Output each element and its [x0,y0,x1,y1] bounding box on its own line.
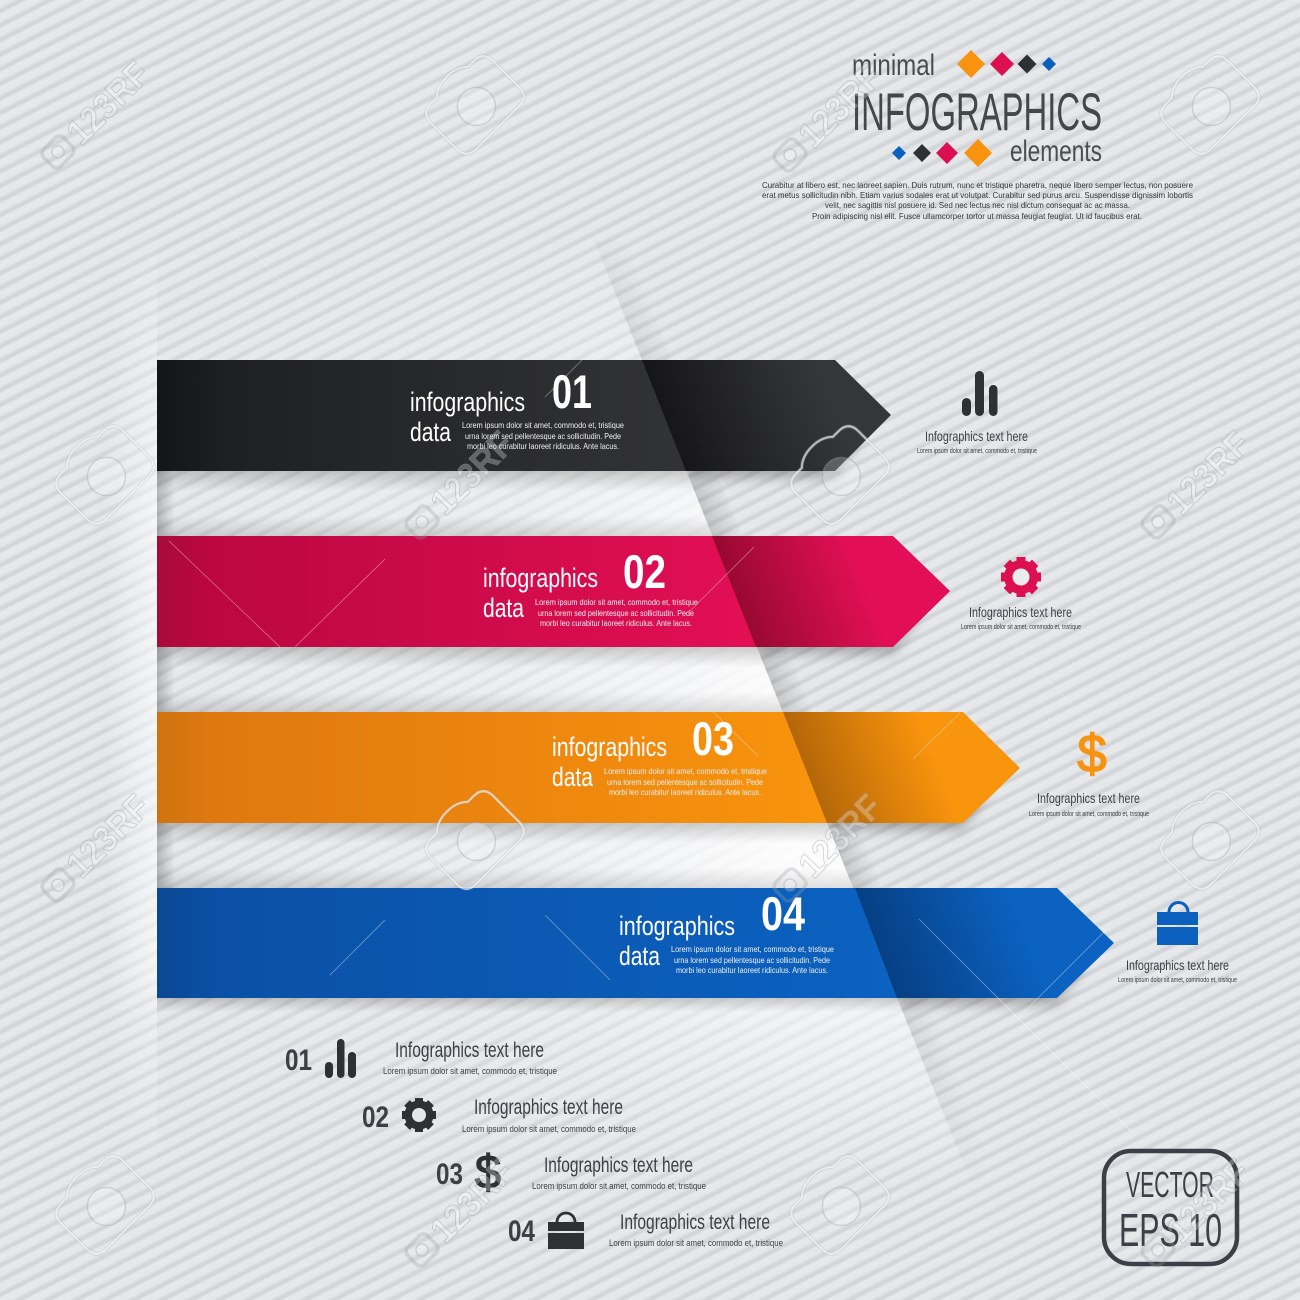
right label 03: Lorem ipsum dolor sit amet, commodo et, tristique [1029,811,1149,818]
description text: Proin adipiscing nisl elit. Fusce ullamcorper tortor ut massa feugiat feugiat. Ut id faucibus erat. [812,211,1142,221]
list text 02: Lorem ipsum dolor sit amet, commodo et, tristique [462,1124,636,1134]
ribbon 03 fold shade [783,712,1020,823]
panel: ribbon 02 [157,536,950,647]
watermark logos: 123RF [1158,423,1258,523]
list number 01: 01 [285,1044,312,1077]
title: minimal: minimal [852,49,935,82]
right label 03: Infographics text here [1037,790,1140,806]
list text 01: Lorem ipsum dolor sit amet, commodo et, tristique [383,1066,557,1076]
icon: dollar, orange: $ [1077,725,1107,784]
ribbon 01 heading: infographics [410,387,525,417]
icon: dollar: $ [475,1145,501,1198]
arrow drop shadows [690,440,1085,1005]
list text 04 [609,1211,783,1248]
icon: briefcase, blue [1157,902,1198,945]
ribbon 01 subheading: data [410,417,452,447]
icon: gear, crimson [1001,557,1041,597]
list text 03 [532,1154,706,1191]
watermark logos: 123RF [58,786,158,886]
ribbon 04 subheading: data [619,941,661,971]
bottom diamonds [892,139,992,167]
ribbon 03 subheading: data [552,762,594,792]
ribbon 03 body text [604,766,767,797]
panel: ribbon 04 [157,887,1114,998]
icon: bar chart [325,1039,356,1078]
description text: velit, nec sagittis nisl posuere id. Sed nec lectus nec nisl dictum consequat ac ac massa. [825,200,1130,210]
ribbon 02 body text: urna lorem sed pellentesque ac sollicitudin. Pede [538,608,694,618]
ribbon 01 body text: Lorem ipsum dolor sit amet, commodo et, tristique [462,420,624,430]
description text: erat metus sollicitudin nibh. Etiam varius sodales erat ut volutpat. Curabitur sed purus arcu. Suspendisse dignissim lobortis [762,190,1193,200]
ribbon 03 body text: Lorem ipsum dolor sit amet, commodo et, tristique [604,766,767,776]
right label 02: Infographics text here [969,604,1072,620]
ribbon 03 heading: infographics [552,732,667,762]
ribbon 04 fold shade [855,888,1114,998]
description text: Curabitur at libero est, nec laoreet sapien. Duis rutrum, nunc et tristique pharetra, neque libero semper lectus, non posuere [762,180,1193,190]
watermark logos: 123RF [790,56,890,156]
ribbon 02 subheading: data [483,593,525,623]
ribbon 03 body text: morbi leo curabitur laoreet ridiculus. Ante lacus. [609,787,761,797]
top diamonds [957,50,1056,78]
right label 04: Lorem ipsum dolor sit amet, commodo et, tristique [1118,977,1237,984]
ribbon 01 fold shade [642,360,891,471]
ribbon 04 number: 04 [761,887,805,940]
watermark logos: 123RF [1158,1151,1258,1251]
ribbon 04 body text [671,944,834,975]
list text 02 [462,1096,636,1134]
right label 01: Infographics text here [925,428,1028,444]
ribbon 04 body text: Lorem ipsum dolor sit amet, commodo et, tristique [671,944,834,954]
ribbon 03 number: 03 [692,712,734,765]
right label 03 [1029,790,1149,818]
list item 04 [508,1211,783,1249]
list text 01 [383,1039,557,1076]
ribbon 04 body text: morbi leo curabitur laoreet ridiculus. Ante lacus. [676,965,828,975]
watermark logos: 123RF [790,786,890,886]
ribbon 02 body text [535,597,698,628]
ribbon 02 body text: Lorem ipsum dolor sit amet, commodo et, tristique [535,597,698,607]
list number 02: 02 [362,1101,389,1134]
folded paper panel [122,284,946,1120]
badge: vector eps 10: EPS 10 [1119,1204,1222,1256]
icon: briefcase [548,1213,584,1249]
ribbon 01 body text: morbi leo curabitur laoreet ridiculus. Ante lacus. [467,441,619,451]
description text [762,180,1193,221]
list text 03: Infographics text here [544,1154,693,1177]
list text 04: Lorem ipsum dolor sit amet, commodo et, tristique [609,1238,783,1248]
ribbon 01 body text [462,420,624,451]
ribbon 04 heading: infographics [619,911,735,941]
watermark logos: 123RF [422,1151,522,1251]
right label 04: Infographics text here [1126,957,1229,973]
list text 02: Infographics text here [474,1096,623,1119]
right label 02 [961,604,1081,631]
ribbon 02 heading: infographics [483,563,598,593]
list text 04: Infographics text here [620,1211,770,1234]
icon: gear [402,1098,436,1132]
panel: ribbon 03 [157,712,1020,823]
ribbon 02 body text: morbi leo curabitur laoreet ridiculus. Ante lacus. [540,618,692,628]
list number 03: 03 [436,1158,463,1191]
right label 04 [1118,957,1237,984]
list text 01: Infographics text here [395,1039,544,1062]
right label 01: Lorem ipsum dolor sit amet, commodo et, tristique [917,448,1037,455]
badge: vector eps 10 [1104,1151,1237,1264]
panel: ribbon 01 [157,360,891,471]
title: INFOGRAPHICS: INFOGRAPHICS [852,83,1102,142]
title: elements: elements [1010,135,1102,168]
ribbon 01 number: 01 [552,365,592,418]
right label 01 [917,428,1037,455]
list item 01 [285,1039,557,1078]
ribbon 01 body text: urna lorem sed pellentesque ac sollicitudin. Pede [465,431,621,441]
hairline crosses [169,173,1135,1135]
watermark logos: 123RF [422,423,522,523]
ribbon 04 body text: urna lorem sed pellentesque ac sollicitudin. Pede [674,955,830,965]
ribbon 02 number: 02 [623,545,666,598]
list item 03 [436,1145,706,1198]
ribbon 03 body text: urna lorem sed pellentesque ac sollicitudin. Pede [607,777,763,787]
list text 03: Lorem ipsum dolor sit amet, commodo et, tristique [532,1181,706,1191]
right label 02: Lorem ipsum dolor sit amet, commodo et, tristique [961,624,1081,631]
list number 04: 04 [508,1215,535,1248]
gap shadows between ribbons [157,471,917,1012]
icon: bar chart, black [962,371,998,416]
title block [762,49,1193,221]
ribbon 02 fold shade [712,536,950,647]
badge: vector eps 10: VECTOR [1126,1164,1214,1205]
list item 02 [362,1096,636,1134]
watermark logos: 123RF [58,53,158,153]
